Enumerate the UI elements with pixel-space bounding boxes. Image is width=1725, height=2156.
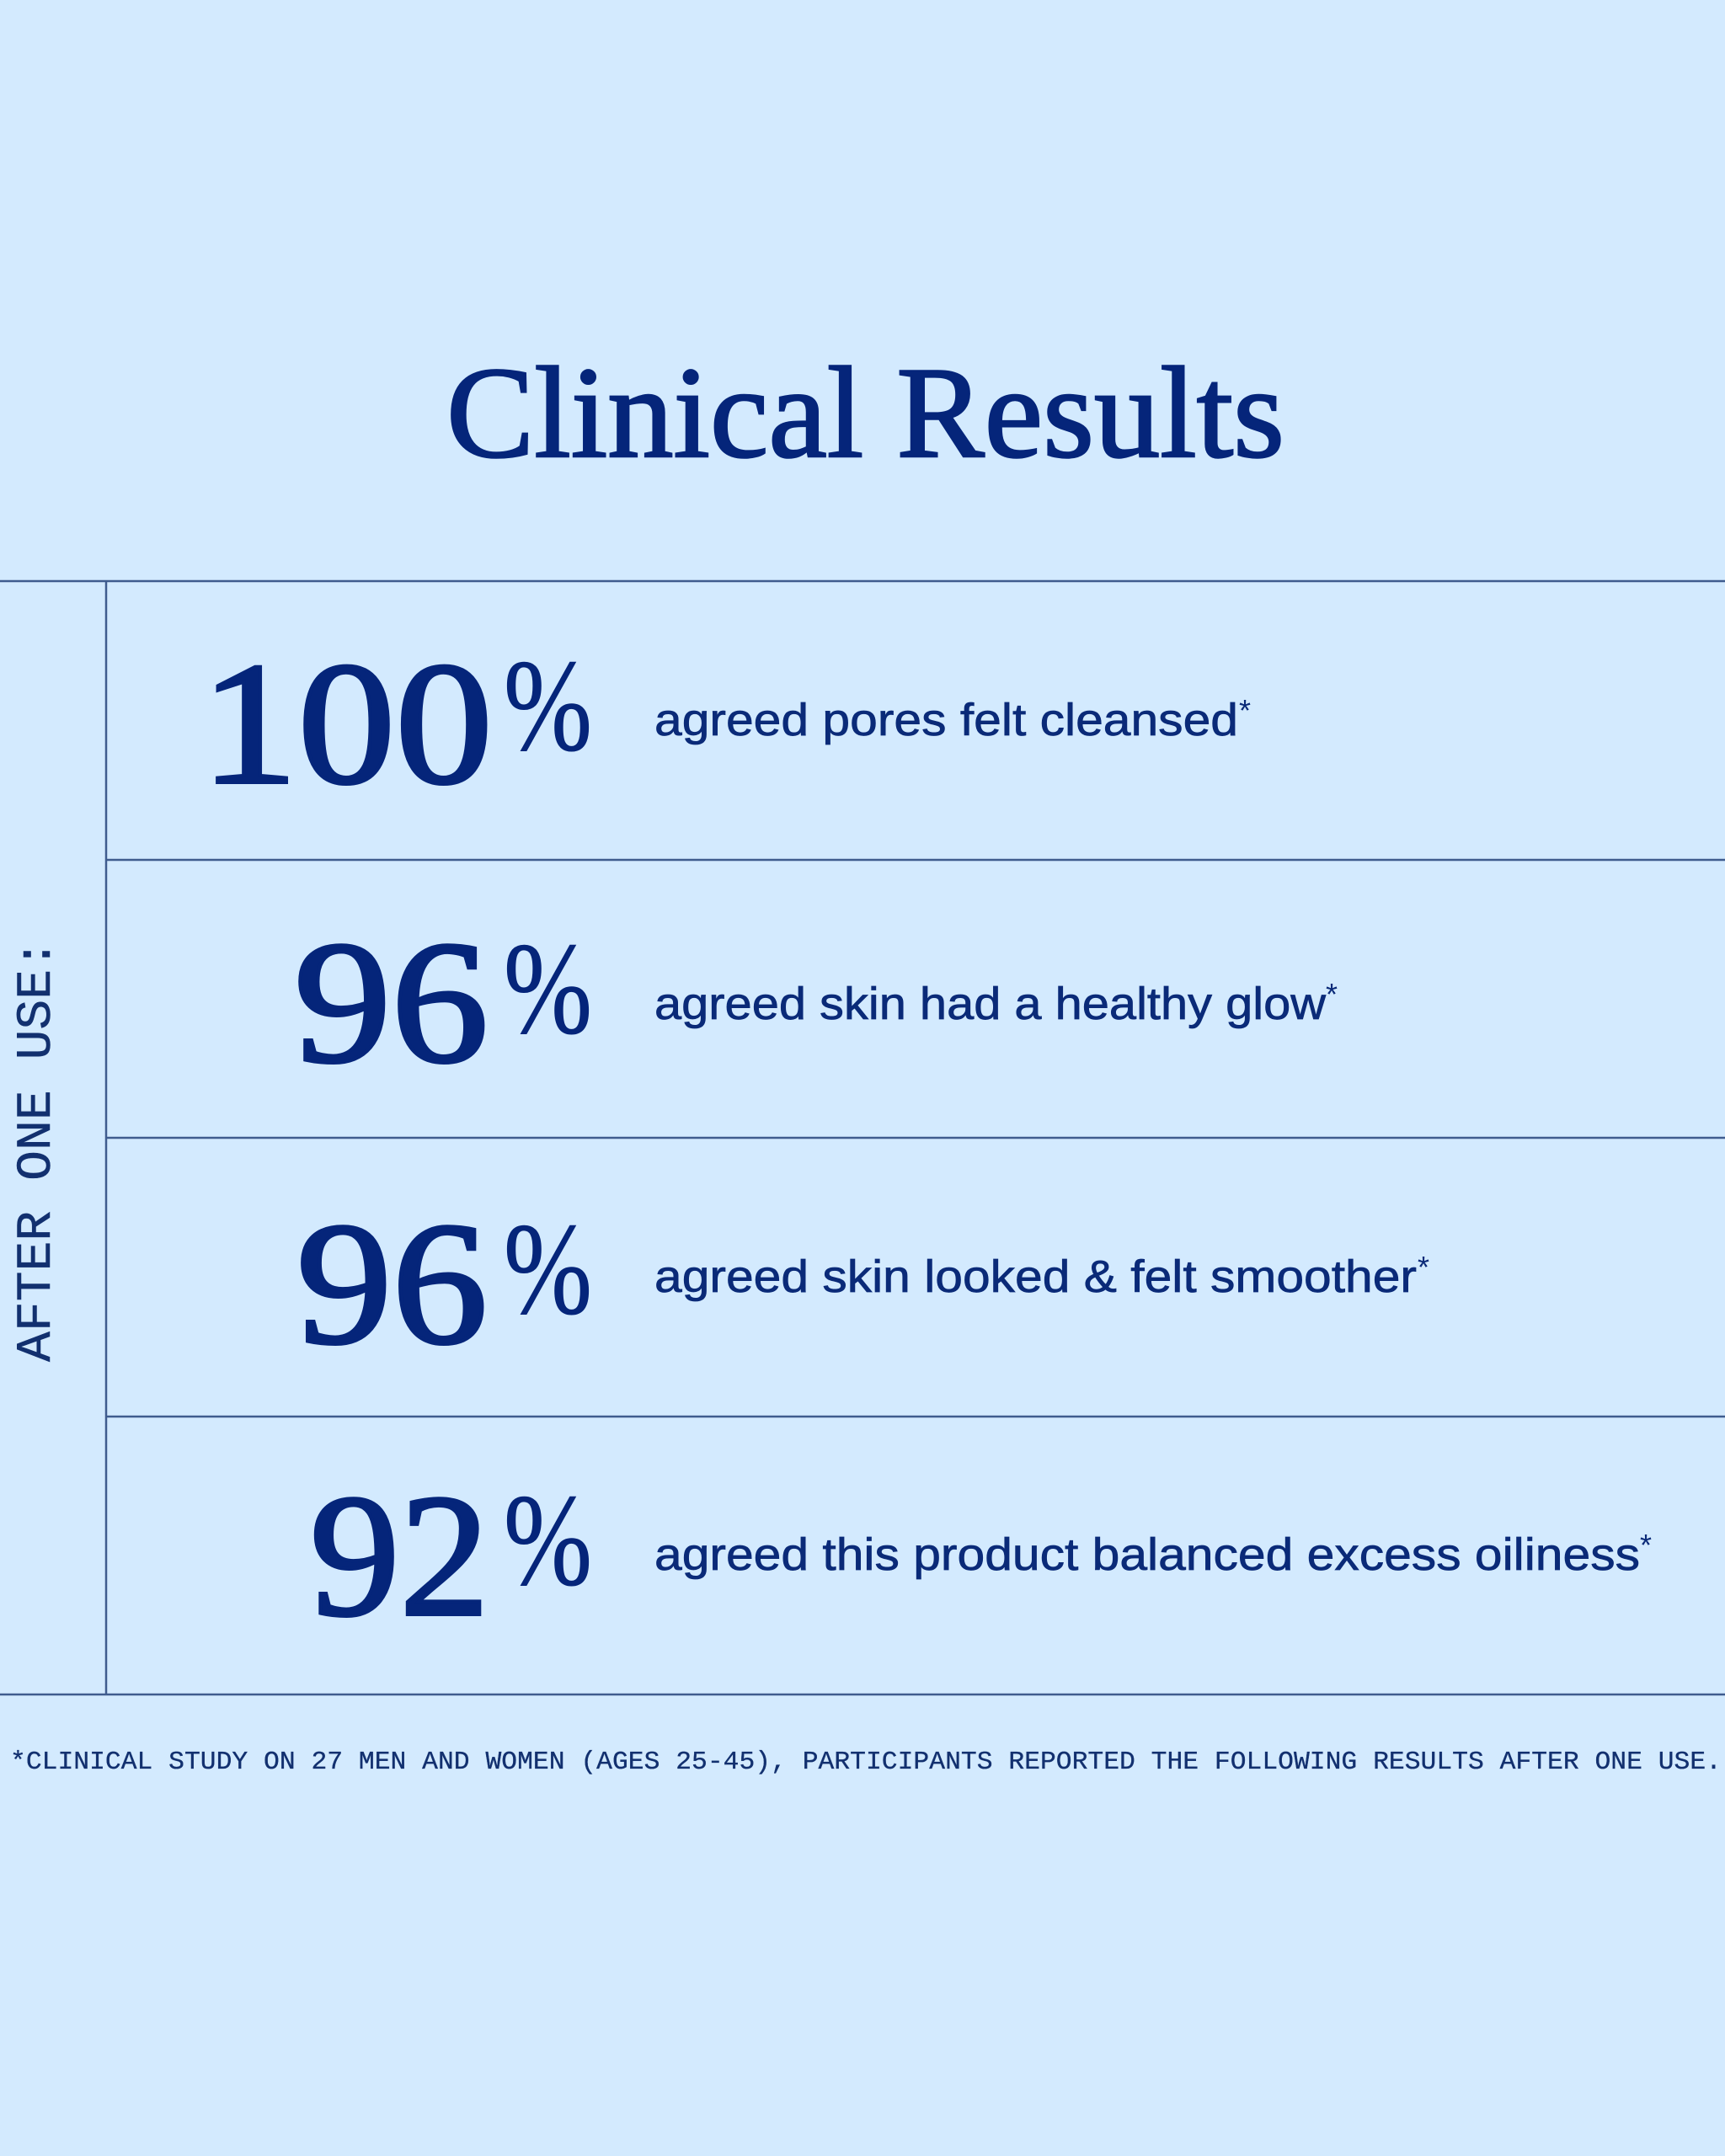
row 1: 100 percent [200,627,1251,820]
label: looked and felt smoother: agreed skin looked & felt smoother [654,1251,1417,1302]
label: healthy glow: agreed skin had a healthy glow [654,979,1327,1029]
title: Clinical Results [446,340,1284,485]
row 3: 96 percent [296,1187,1429,1380]
footnote: *CLINICAL STUDY ON 27 MEN AND WOMEN (AGES 25-45), PARTICIPANTS REPORTED THE FOLLOWING RESULTS AFTER ONE USE. [10,1748,1722,1777]
stat: 92% [310,1459,592,1652]
stat: 96%: % [504,915,592,1061]
stat: 96% [294,905,592,1099]
stat: 100% [200,627,592,820]
stat: 100%: % [504,632,592,778]
label: balanced oiliness: * [1640,1528,1652,1562]
stat: 92%: 92 [310,1459,489,1652]
label: pores cleansed: agreed pores felt cleansed [654,695,1238,745]
label: healthy glow: * [1326,977,1338,1011]
row 2: 96 percent [294,905,1338,1099]
stat: 96%: 96 [296,1187,488,1380]
side label: after one use: AFTER ONE USE: [10,939,65,1362]
stat: 96%: 96 [294,905,489,1099]
row 4: 92 percent [310,1459,1652,1652]
stat: 100%: 100 [200,627,493,820]
stat: 96% [296,1187,592,1380]
label: balanced oiliness: agreed this product balanced excess oiliness [654,1529,1640,1580]
label: pores cleansed: * [1239,693,1251,728]
stat: 92%: % [504,1467,592,1613]
stat: 96%: % [504,1196,592,1342]
label: looked and felt smoother: * [1418,1250,1429,1284]
